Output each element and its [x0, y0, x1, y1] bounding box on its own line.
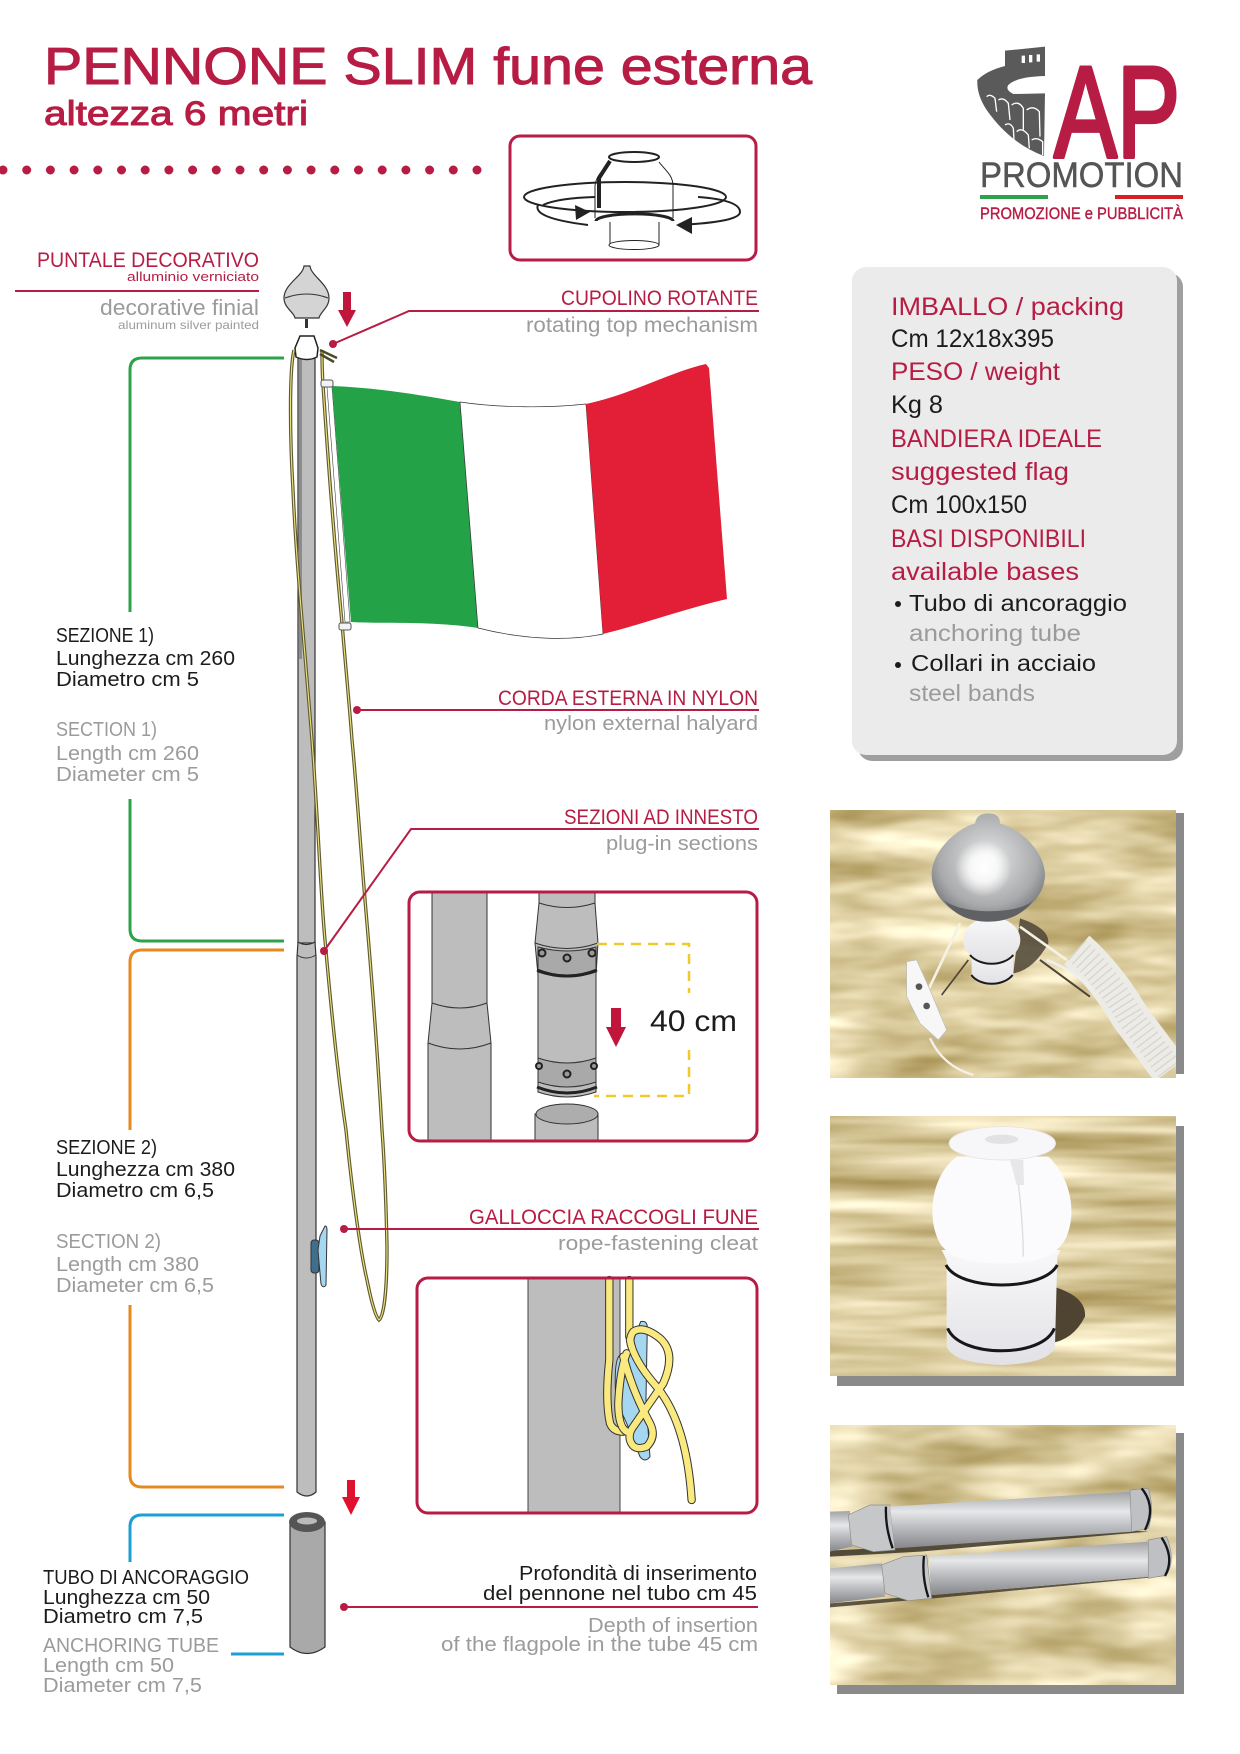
text: anchoring tube: Diameter cm 7,5 — [43, 1675, 202, 1697]
title: PENNONE SLIM fune esterna — [44, 38, 812, 96]
text: section 2: Diameter cm 6,5 — [56, 1275, 214, 1297]
callout: rotating top: rotating top mechanism — [526, 314, 758, 337]
callout: plug-in sections: plug-in sections — [606, 833, 758, 855]
arrow: finial — [338, 292, 356, 327]
logo: AP letters: AP — [1054, 39, 1180, 185]
callout: insertion depth: of the flagpole in the tube 45 cm — [441, 1634, 758, 1656]
arrow: insertion — [606, 1008, 626, 1047]
text: anchoring tube: Length cm 50 — [43, 1655, 174, 1677]
finial label — [15, 249, 259, 332]
panel: packing info: suggested flag — [891, 458, 1069, 486]
callout: insertion depth: Profondità di inserimento — [519, 1563, 757, 1585]
text: section 2: SEZIONE 2) — [56, 1137, 157, 1159]
rotating cap — [295, 336, 318, 360]
cleat on pole — [311, 1226, 327, 1287]
callout: cleat: GALLOCCIA RACCOGLI FUNE — [469, 1206, 758, 1229]
40 cm dashed dimension — [594, 944, 689, 1096]
logo — [977, 39, 1184, 223]
text: section 1: Length cm 260 — [56, 743, 199, 765]
finial label: decorative finial — [100, 295, 259, 320]
text: section 2: SECTION 2) — [56, 1231, 161, 1253]
text: anchoring tube — [43, 1567, 249, 1697]
callout: cleat — [340, 1206, 759, 1255]
callout: rotating top — [329, 287, 759, 348]
panel: packing info: BASI DISPONIBILI — [891, 525, 1086, 553]
panel: packing info: Kg 8 — [891, 391, 943, 419]
subtitle: altezza 6 metri — [44, 95, 308, 133]
panel: plug-in detail — [409, 892, 757, 1141]
photo: aluminium plug-in sections — [830, 1425, 1184, 1694]
blue bracket: anchoring tube — [130, 1515, 284, 1654]
panel: packing info: Collari in acciaio — [911, 650, 1096, 676]
callout: insertion depth: Depth of insertion — [588, 1615, 758, 1637]
text: section 1 — [56, 625, 235, 786]
panel: packing info: Cm 100x150 — [891, 491, 1027, 519]
finial label: PUNTALE DECORATIVO — [37, 249, 259, 272]
finial — [284, 266, 329, 328]
panel: cleat detail — [417, 1278, 757, 1513]
text: section 2: Diametro cm 6,5 — [56, 1180, 214, 1202]
green bracket: section 1 — [130, 358, 284, 941]
text: section 1: SEZIONE 1) — [56, 625, 154, 647]
callout: insertion depth — [340, 1563, 758, 1656]
finial label: aluminum silver painted — [118, 318, 259, 332]
orange bracket: section 2 — [130, 950, 284, 1487]
inserted sleeve — [535, 893, 598, 1097]
callout: nylon halyard: CORDA ESTERNA IN NYLON — [498, 687, 758, 710]
flag: red stripe — [586, 364, 727, 634]
callout: nylon halyard — [353, 687, 759, 735]
finial label: alluminio verniciato — [127, 269, 259, 284]
callout: rotating top: CUPOLINO ROTANTE — [561, 287, 758, 310]
callout: cleat: rope-fastening cleat — [558, 1233, 758, 1255]
callout: insertion depth: del pennone nel tubo cm 45 — [483, 1583, 757, 1605]
logo: tagline: PROMOZIONE e PUBBLICITÀ — [980, 204, 1184, 223]
top cleat knot — [320, 350, 337, 362]
pole: joint and section 2 — [297, 942, 316, 1496]
text: anchoring tube: ANCHORING TUBE — [43, 1635, 219, 1657]
flagpole — [284, 266, 387, 1496]
flag: white stripe — [460, 402, 603, 638]
panel: packing info: anchoring tube — [909, 620, 1081, 646]
halyard rope — [290, 350, 387, 1320]
text: section 1: Diametro cm 5 — [56, 669, 199, 691]
panel: packing info: steel bands — [909, 680, 1035, 706]
logo: colosseum — [977, 47, 1045, 156]
text: section 2 — [56, 1137, 235, 1297]
text: section 2: Length cm 380 — [56, 1254, 199, 1276]
flag: green stripe — [332, 386, 478, 628]
callout: plug-in sections — [320, 806, 759, 955]
text: section 2: Lunghezza cm 380 — [56, 1159, 235, 1181]
text: anchoring tube: Lunghezza cm 50 — [43, 1587, 210, 1609]
logo: tricolour bars — [980, 195, 1183, 199]
flag — [327, 364, 727, 638]
panel: packing info: IMBALLO / packing — [891, 293, 1124, 321]
text: anchoring tube: TUBO DI ANCORAGGIO — [43, 1567, 249, 1589]
flag clips — [321, 380, 351, 630]
text: anchoring tube: Diametro cm 7,5 — [43, 1606, 203, 1628]
panel: packing info: Cm 12x18x395 — [891, 325, 1054, 353]
callout: plug-in sections: SEZIONI AD INNESTO — [564, 806, 758, 829]
panel: packing info: PESO / weight — [891, 358, 1060, 386]
text: section 1: SECTION 1) — [56, 719, 157, 741]
dimension label: 40 cm — [650, 1005, 737, 1038]
panel: packing info: available bases — [891, 558, 1079, 586]
photo: rotating white cap — [830, 1116, 1184, 1386]
panel: rotating mechanism icon — [510, 136, 756, 260]
panel: packing info — [852, 267, 1183, 761]
panel: packing info: BANDIERA IDEALE — [891, 425, 1102, 453]
arrow: pole into tube — [342, 1480, 360, 1515]
left assembled pole — [428, 893, 491, 1141]
pole: section 1 — [298, 358, 315, 943]
anchoring tube — [289, 1512, 325, 1654]
text: section 1: Lunghezza cm 260 — [56, 648, 235, 670]
panel: packing info: Tubo di ancoraggio — [909, 590, 1127, 616]
knot — [607, 1280, 692, 1500]
flag: hoist strip — [327, 387, 350, 622]
callout: nylon halyard: nylon external halyard — [544, 713, 758, 735]
logo: PROMOTION: PROMOTION — [980, 156, 1183, 195]
text: section 1: Diameter cm 5 — [56, 764, 199, 786]
receiving tube — [535, 1104, 598, 1141]
photo: finial with rope and cleat — [830, 810, 1184, 1078]
pole — [528, 1279, 620, 1512]
